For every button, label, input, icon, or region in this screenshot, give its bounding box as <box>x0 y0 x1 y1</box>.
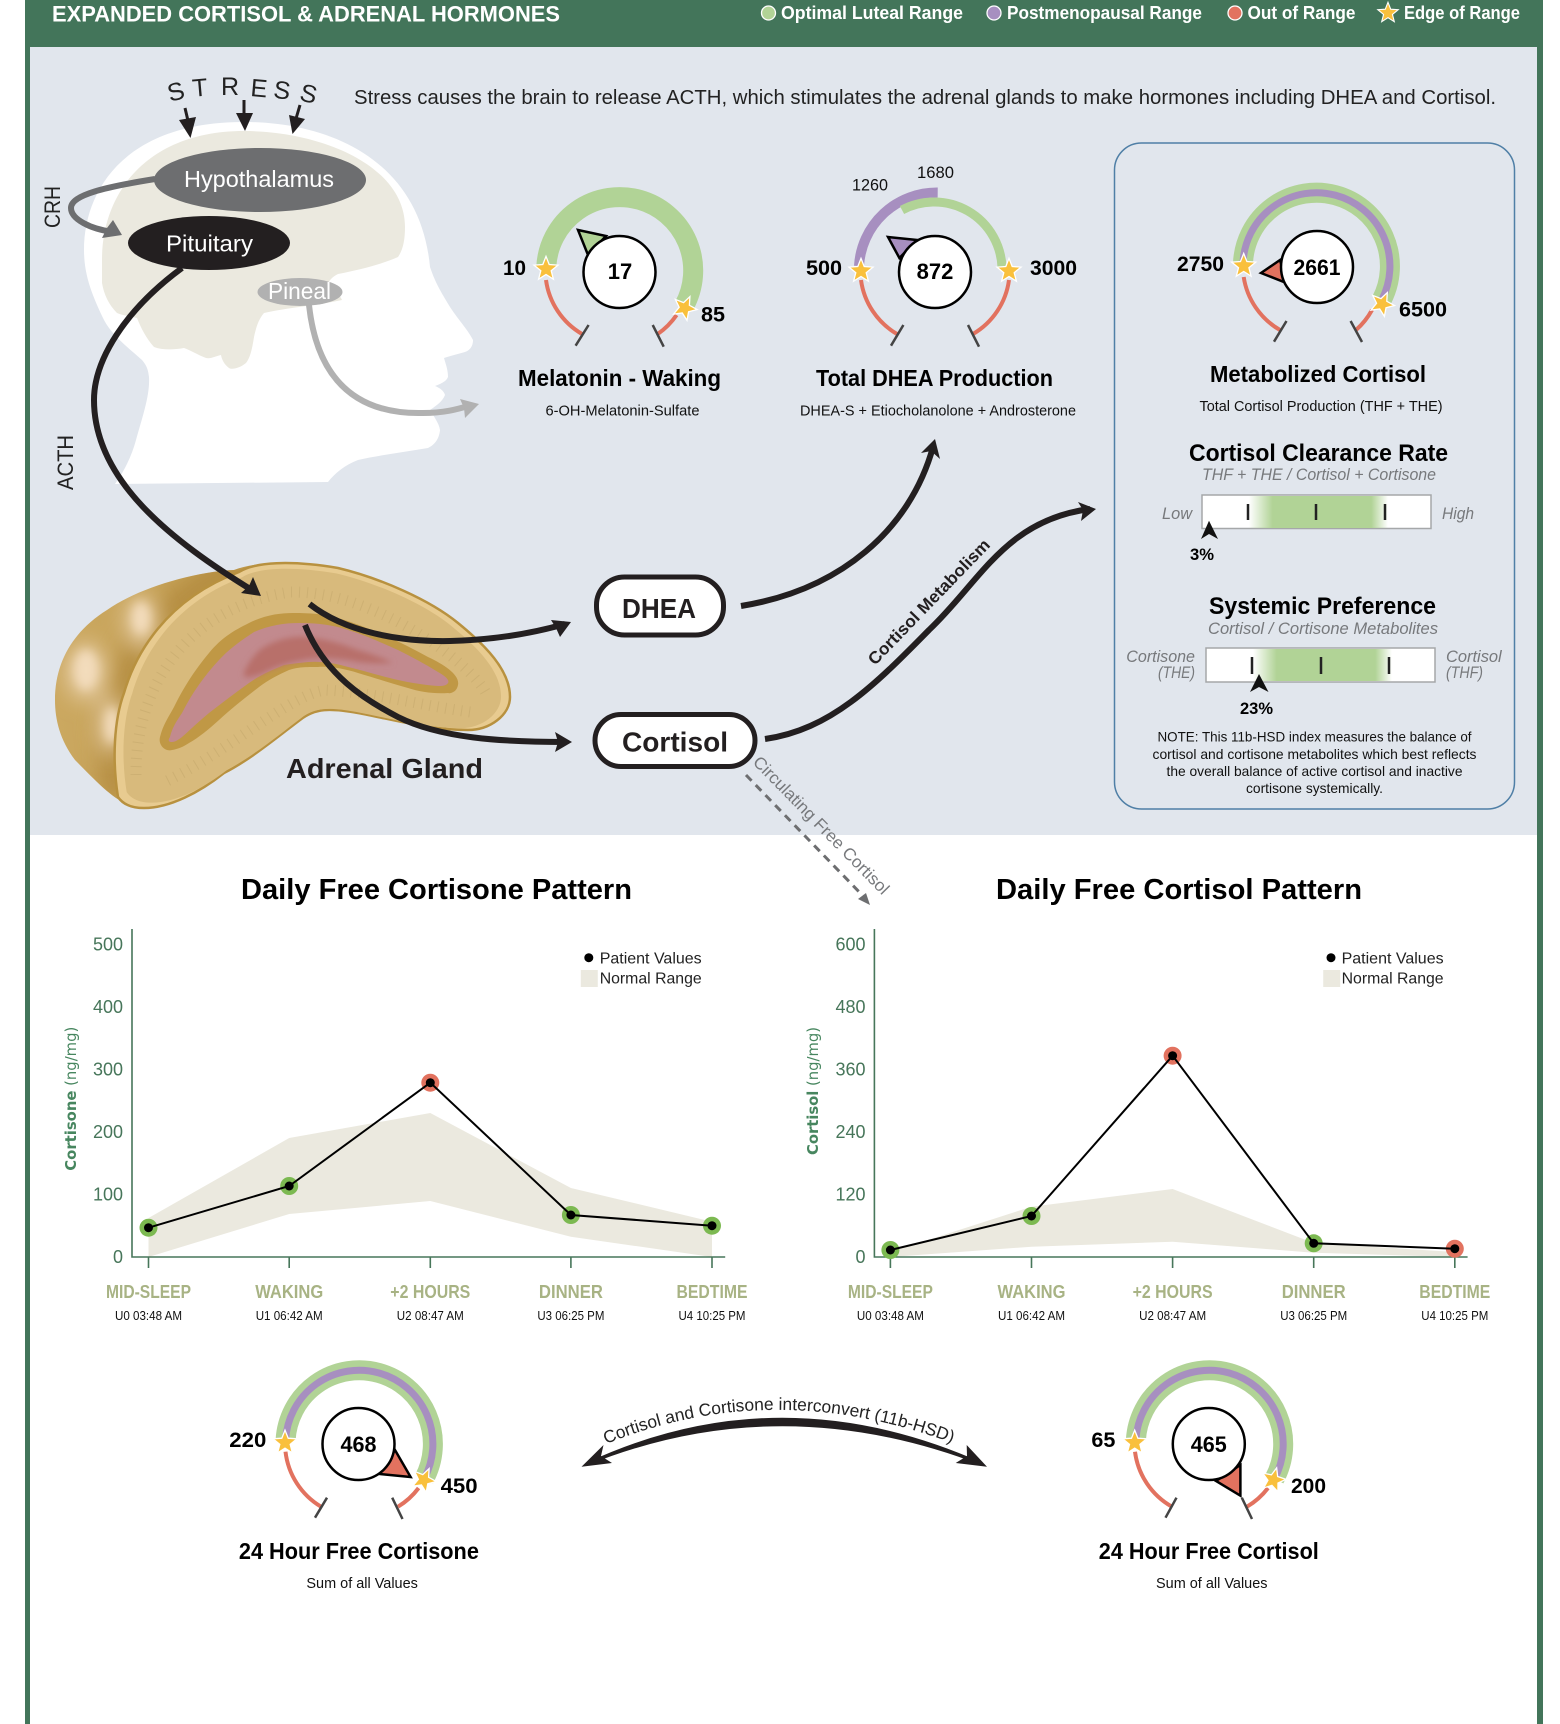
x axis labels <box>106 1282 748 1323</box>
gauge: 24 hour free cortisone: 220 <box>229 1429 266 1452</box>
gland cut face <box>115 563 510 808</box>
note: cortisol and cortisone metabolites which best reflects <box>1152 746 1476 762</box>
y axis labels <box>93 934 123 1267</box>
x axis labels: BEDTIME <box>1419 1282 1490 1302</box>
legend: Optimal Luteal Range <box>781 3 963 23</box>
gland medulla border <box>160 613 458 750</box>
head silhouette <box>84 122 473 484</box>
ACTH label: ACTH <box>53 435 78 490</box>
y axis labels: 120 <box>835 1184 866 1204</box>
gauge: 24 hour free cortisol: 200 <box>1291 1475 1326 1498</box>
normal range area <box>890 1189 1455 1257</box>
patient values line <box>881 1047 1464 1259</box>
y axis labels: 400 <box>93 997 123 1017</box>
clearance rate bar: 3% <box>1190 545 1214 564</box>
cortisone gauge title: 24 Hour Free Cortisone <box>239 1538 479 1564</box>
chart legend: Normal Range <box>600 970 702 988</box>
adrenal gland label: Adrenal Gland <box>286 753 483 784</box>
heading: daily free cortisol: Daily Free Cortisol Pattern <box>996 874 1362 906</box>
melatonin title: Melatonin - Waking <box>518 365 721 391</box>
gland shading <box>64 565 240 800</box>
gauge: total DHEA: 500 <box>806 257 842 280</box>
normal range area <box>148 1113 712 1257</box>
chart legend: Patient Values <box>1342 950 1444 968</box>
note: the overall balance of active cortisol and inactive <box>1166 763 1463 779</box>
gland medulla core <box>244 637 393 677</box>
cortisone gauge subtitle: Sum of all Values <box>306 1575 418 1592</box>
x axis labels: U4 10:25 PM <box>1421 1308 1488 1323</box>
gauge: metabolized cortisol: 2750 <box>1177 253 1224 276</box>
pineal arrow <box>309 305 479 418</box>
y axis title: Cortisone (ng/mg) <box>62 1027 80 1171</box>
y axis labels: 360 <box>835 1060 866 1080</box>
x axis labels: DINNER <box>539 1282 603 1302</box>
y axis labels <box>835 934 866 1267</box>
x axis labels: U4 10:25 PM <box>678 1308 746 1323</box>
gland cortex fibers <box>136 592 487 782</box>
note <box>1152 729 1476 796</box>
x axis labels: +2 HOURS <box>390 1282 470 1302</box>
x axis labels: U1 06:42 AM <box>998 1308 1065 1323</box>
gauge: metabolized cortisol <box>1177 193 1447 342</box>
chart legend: Normal Range <box>1342 970 1444 988</box>
chart legend <box>581 950 702 988</box>
cortisol gauge subtitle: Sum of all Values <box>1156 1575 1268 1592</box>
y axis title: Cortisol (ng/mg) <box>804 1027 822 1155</box>
systemic preference bar: Cortisone <box>1126 647 1195 666</box>
clearance rate bar: High <box>1442 504 1474 523</box>
cortisol gauge title: 24 Hour Free Cortisol <box>1099 1538 1319 1564</box>
arrow: DHEA to production <box>741 439 940 606</box>
hypothalamus <box>154 148 366 212</box>
gauge: metabolized cortisol: 6500 <box>1399 299 1447 322</box>
legend: Postmenopausal Range <box>1007 3 1202 23</box>
gauge: total DHEA: 872 <box>917 259 953 284</box>
pituitary <box>128 216 290 270</box>
melatonin subtitle: 6-OH-Melatonin-Sulfate <box>546 402 700 420</box>
clearance rate subtitle: THF + THE / Cortisol + Cortisone <box>1202 465 1436 484</box>
DHEA pill: DHEA <box>622 593 696 624</box>
note: NOTE: This 11b-HSD index measures the balance of <box>1158 729 1472 745</box>
stress arrows <box>179 100 305 138</box>
systemic preference bar: (THE) <box>1158 663 1195 682</box>
clearance rate title: Cortisol Clearance Rate <box>1189 440 1448 467</box>
x axis labels <box>848 1282 1490 1323</box>
circulating free cortisol label: Circulating Free Cortisol <box>749 752 893 898</box>
legend: Edge of Range <box>1404 3 1520 23</box>
hypothalamus: Hypothalamus <box>184 166 334 192</box>
x axis labels: BEDTIME <box>676 1282 748 1302</box>
arrow: gland to DHEA <box>310 604 571 641</box>
patient values line <box>140 1074 721 1237</box>
x axis labels: DINNER <box>1282 1282 1346 1302</box>
x axis labels: WAKING <box>998 1282 1066 1302</box>
systemic preference bar: (THF) <box>1446 663 1483 682</box>
x axis labels: U3 06:25 PM <box>537 1308 604 1323</box>
axes <box>874 929 1468 1268</box>
metabolized cortisol title: Metabolized Cortisol <box>1210 361 1426 387</box>
y axis labels: 300 <box>93 1060 123 1080</box>
x axis labels: U1 06:42 AM <box>256 1308 323 1323</box>
systemic preference bar: Cortisol <box>1446 647 1503 666</box>
gauge: total DHEA: 1260 <box>852 176 888 195</box>
circulating free cortisol arrow <box>746 775 870 905</box>
interconvert arrow <box>582 1419 987 1467</box>
x axis labels: U0 03:48 AM <box>115 1308 182 1323</box>
gauge: melatonin <box>503 197 725 420</box>
y axis labels: 480 <box>835 997 866 1017</box>
y axis labels: 500 <box>93 934 123 954</box>
systemic preference bar <box>1126 647 1503 718</box>
gauge: metabolized cortisol: 2661 <box>1294 255 1340 280</box>
gauge: melatonin: 17 <box>608 259 632 284</box>
ACTH arrow <box>94 268 261 596</box>
brain <box>102 131 405 369</box>
chart legend: Patient Values <box>600 950 702 968</box>
title: EXPANDED CORTISOL & ADRENAL HORMONES <box>52 2 560 27</box>
gauge: total DHEA: 3000 <box>1030 257 1077 280</box>
gland outer surface <box>55 563 510 808</box>
gauge: total DHEA: 1680 <box>917 163 954 182</box>
pineal: Pineal <box>268 278 331 304</box>
DHEA pill <box>596 577 724 635</box>
gauge: melatonin: 10 <box>503 257 526 280</box>
CRH label: CRH <box>40 186 65 228</box>
legend <box>762 2 1520 23</box>
DHEA subtitle: DHEA-S + Etiocholanolone + Androsterone <box>800 402 1076 420</box>
x axis labels: U0 03:48 AM <box>857 1308 924 1323</box>
gauge: 24 hour free cortisol: 465 <box>1191 1432 1227 1457</box>
gauge: 24 hour free cortisol <box>1091 1370 1326 1592</box>
y axis labels: 600 <box>835 934 866 954</box>
gauge: melatonin: 85 <box>701 304 725 327</box>
y axis labels: 240 <box>835 1122 866 1142</box>
systemic preference subtitle: Cortisol / Cortisone Metabolites <box>1208 619 1438 638</box>
x axis labels: WAKING <box>255 1282 323 1302</box>
metabolized cortisol subtitle: Total Cortisol Production (THF + THE) <box>1200 398 1443 415</box>
cortisol pill <box>595 714 755 766</box>
panel: metabolized cortisol <box>1114 143 1514 809</box>
pineal <box>258 278 342 306</box>
systemic preference title: Systemic Preference <box>1209 593 1436 620</box>
arrow: gland to cortisol <box>305 625 572 752</box>
pituitary: Pituitary <box>166 230 254 256</box>
y axis labels: 0 <box>855 1247 866 1267</box>
gauge: 24 hour free cortisone: 450 <box>441 1475 478 1498</box>
heading: daily free cortisone: Daily Free Cortisone Pattern <box>241 874 632 906</box>
x axis labels: MID-SLEEP <box>848 1282 933 1302</box>
clearance rate bar <box>1162 495 1474 564</box>
DHEA title: Total DHEA Production <box>816 365 1053 391</box>
legend: Out of Range <box>1248 3 1356 23</box>
x axis labels: U2 08:47 AM <box>1139 1308 1206 1323</box>
x axis labels: +2 HOURS <box>1133 1282 1213 1302</box>
axes <box>132 929 725 1268</box>
chart legend <box>1323 950 1444 988</box>
systemic preference bar: 23% <box>1240 699 1273 718</box>
gland medulla <box>169 623 448 742</box>
gland cortex <box>123 569 501 803</box>
note: cortisone systemically. <box>1246 780 1383 796</box>
gauge: 24 hour free cortisone <box>229 1370 479 1592</box>
gauge: total DHEA <box>800 163 1077 420</box>
x axis labels: MID-SLEEP <box>106 1282 191 1302</box>
gauge: 24 hour free cortisol: 65 <box>1091 1429 1116 1452</box>
y axis labels: 100 <box>93 1184 123 1204</box>
CRH arrow <box>71 179 155 238</box>
stress label: STRESS <box>164 73 320 110</box>
chart: cortisol <box>804 929 1490 1323</box>
y axis labels: 200 <box>93 1122 123 1142</box>
intro text: Stress causes the brain to release ACTH, which stimulates the adrenal glands to make hormones including DHEA and Cortisol. <box>354 87 1496 109</box>
clearance rate bar: Low <box>1162 504 1194 523</box>
gauge: 24 hour free cortisone: 468 <box>340 1432 376 1457</box>
cortisol pill: Cortisol <box>622 727 728 758</box>
interconvert label: Cortisol and Cortisone interconvert (11b-HSD) <box>604 1397 954 1445</box>
x axis labels: U3 06:25 PM <box>1280 1308 1347 1323</box>
arrow: cortisol metabolism <box>765 502 1096 739</box>
x axis labels: U2 08:47 AM <box>397 1308 464 1323</box>
adrenal gland <box>55 563 510 808</box>
cortisol metabolism label: Cortisol Metabolism <box>864 535 994 669</box>
chart: cortisone <box>62 929 748 1323</box>
y axis labels: 0 <box>113 1247 123 1267</box>
